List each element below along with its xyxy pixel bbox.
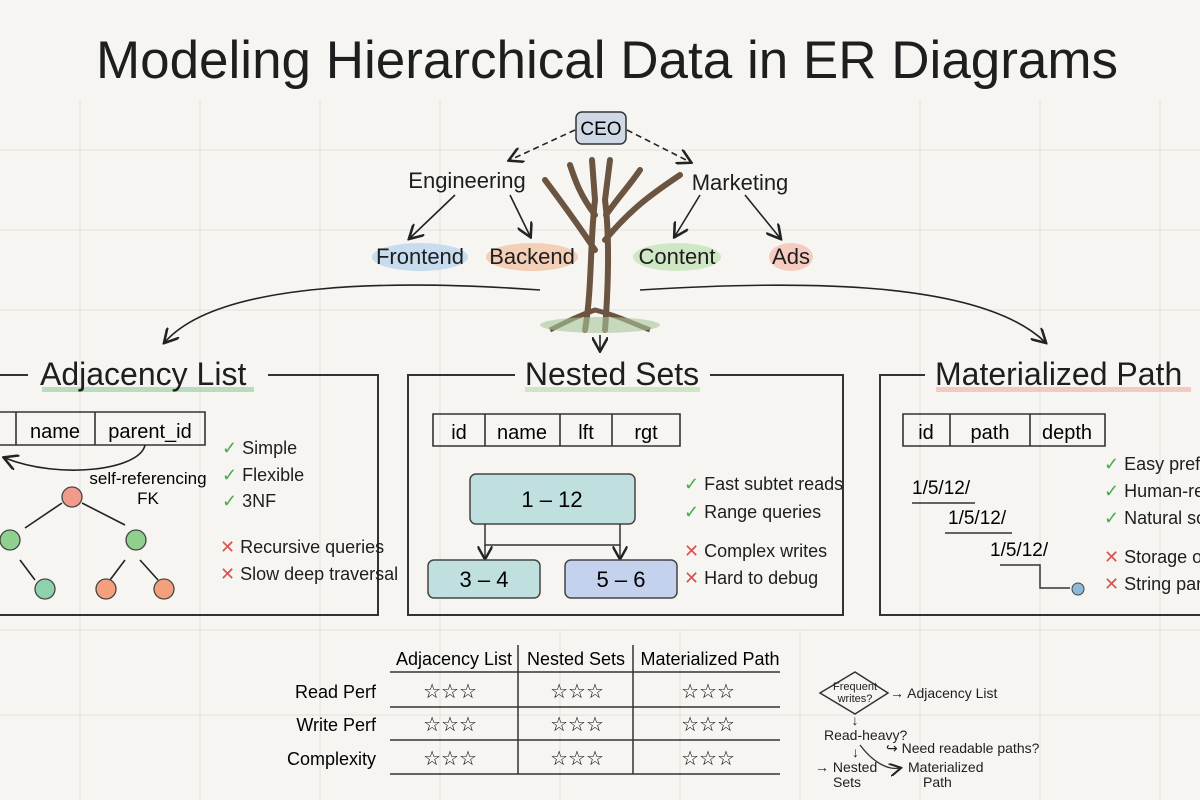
- decision flowchart: Read-heavy?: [824, 727, 907, 743]
- org labels: Marketing: [692, 170, 788, 195]
- comparison table: Adjacency List: [396, 649, 512, 669]
- node: CEO: [576, 112, 626, 144]
- panel: materialized path: 1/5/12/: [948, 508, 1007, 529]
- panel: materialized path: depth: [1042, 422, 1092, 444]
- panel: nested sets: 5 – 6: [597, 567, 645, 592]
- panel: adjacency list: self-referencing: [89, 469, 207, 488]
- panel: nested sets: id: [451, 422, 467, 444]
- panel: nested sets: Nested Sets: [525, 356, 699, 392]
- decision flowchart: ↓: [852, 712, 858, 728]
- panel: nested sets: ✓ Range queries: [684, 502, 821, 522]
- panel: nested sets: 3 – 4: [460, 567, 508, 592]
- panel: adjacency list: ✓ 3NF: [222, 491, 276, 511]
- comparison table: Complexity: [287, 749, 376, 769]
- panel: nested sets: ✓ Fast subtet reads: [684, 474, 843, 494]
- panel: adjacency list: parent_id: [108, 421, 192, 443]
- org labels: Frontend: [376, 244, 464, 269]
- title: Modeling Hierarchical Data in ER Diagrams: [96, 31, 1118, 90]
- panel: adjacency list: ✓ Simple: [222, 438, 297, 458]
- comparison table: ☆☆☆: [423, 681, 477, 703]
- comparison table: Nested Sets: [527, 649, 625, 669]
- comparison table: ☆☆☆: [423, 748, 477, 770]
- org labels: Engineering: [408, 168, 526, 193]
- hierarchy arrows: [165, 130, 1045, 350]
- panel: nested sets: name: [497, 422, 547, 444]
- comparison table: ☆☆☆: [550, 714, 604, 736]
- org labels: Content: [638, 244, 716, 269]
- panel: materialized path: 1/5/12/: [912, 478, 971, 499]
- tree illustration: [540, 160, 680, 333]
- panel: adjacency list: ✕ Slow deep traversal: [220, 564, 398, 584]
- decision flowchart: Path: [923, 774, 952, 790]
- decision flowchart: [815, 672, 1040, 790]
- panel: adjacency list: Adjacency List: [40, 356, 246, 392]
- comparison table: ☆☆☆: [423, 714, 477, 736]
- decision flowchart: Materialized: [908, 759, 983, 775]
- comparison table: ☆☆☆: [550, 681, 604, 703]
- decision flowchart: → Nested: [815, 759, 877, 775]
- panel: materialized path: path: [971, 422, 1009, 444]
- comparison table: ☆☆☆: [681, 714, 735, 736]
- panel: materialized path: Materialized Path: [935, 356, 1182, 392]
- comparison table: ☆☆☆: [681, 681, 735, 703]
- panel: nested sets: lft: [578, 422, 594, 444]
- decision flowchart: writes?: [837, 693, 872, 705]
- node: CEO: CEO: [580, 119, 622, 140]
- decision flowchart: ↓: [852, 744, 859, 760]
- decision flowchart: Frequent: [833, 681, 877, 693]
- comparison table: ☆☆☆: [681, 748, 735, 770]
- panel: nested sets: ✕ Complex writes: [684, 541, 827, 561]
- panel: adjacency list: name: [30, 421, 80, 443]
- decision flowchart: ↪ Need readable paths?: [886, 740, 1040, 756]
- panel: nested sets: rgt: [634, 422, 658, 444]
- panel: adjacency list: FK: [137, 489, 160, 508]
- panel: nested sets: 1 – 12: [521, 487, 583, 512]
- panel: nested sets: ✕ Hard to debug: [684, 568, 818, 588]
- org labels: [372, 168, 813, 271]
- comparison table: Read Perf: [295, 682, 377, 702]
- panel: materialized path: [880, 356, 1200, 615]
- panel: adjacency list: ✕ Recursive queries: [220, 537, 384, 557]
- comparison table: ☆☆☆: [550, 748, 604, 770]
- comparison table: [287, 645, 780, 774]
- panel: materialized path: 1/5/12/: [990, 540, 1049, 561]
- comparison table: Materialized Path: [640, 649, 780, 669]
- org labels: Ads: [772, 244, 810, 269]
- panel: materialized path: id: [918, 422, 934, 444]
- comparison table: Write Perf: [296, 715, 377, 735]
- panel: adjacency list: ✓ Flexible: [222, 465, 304, 485]
- decision flowchart: → Adjacency List: [890, 685, 997, 701]
- panel: adjacency list: [0, 356, 398, 615]
- panel: nested sets: [408, 356, 843, 615]
- org labels: Backend: [489, 244, 575, 269]
- decision flowchart: Sets: [833, 774, 861, 790]
